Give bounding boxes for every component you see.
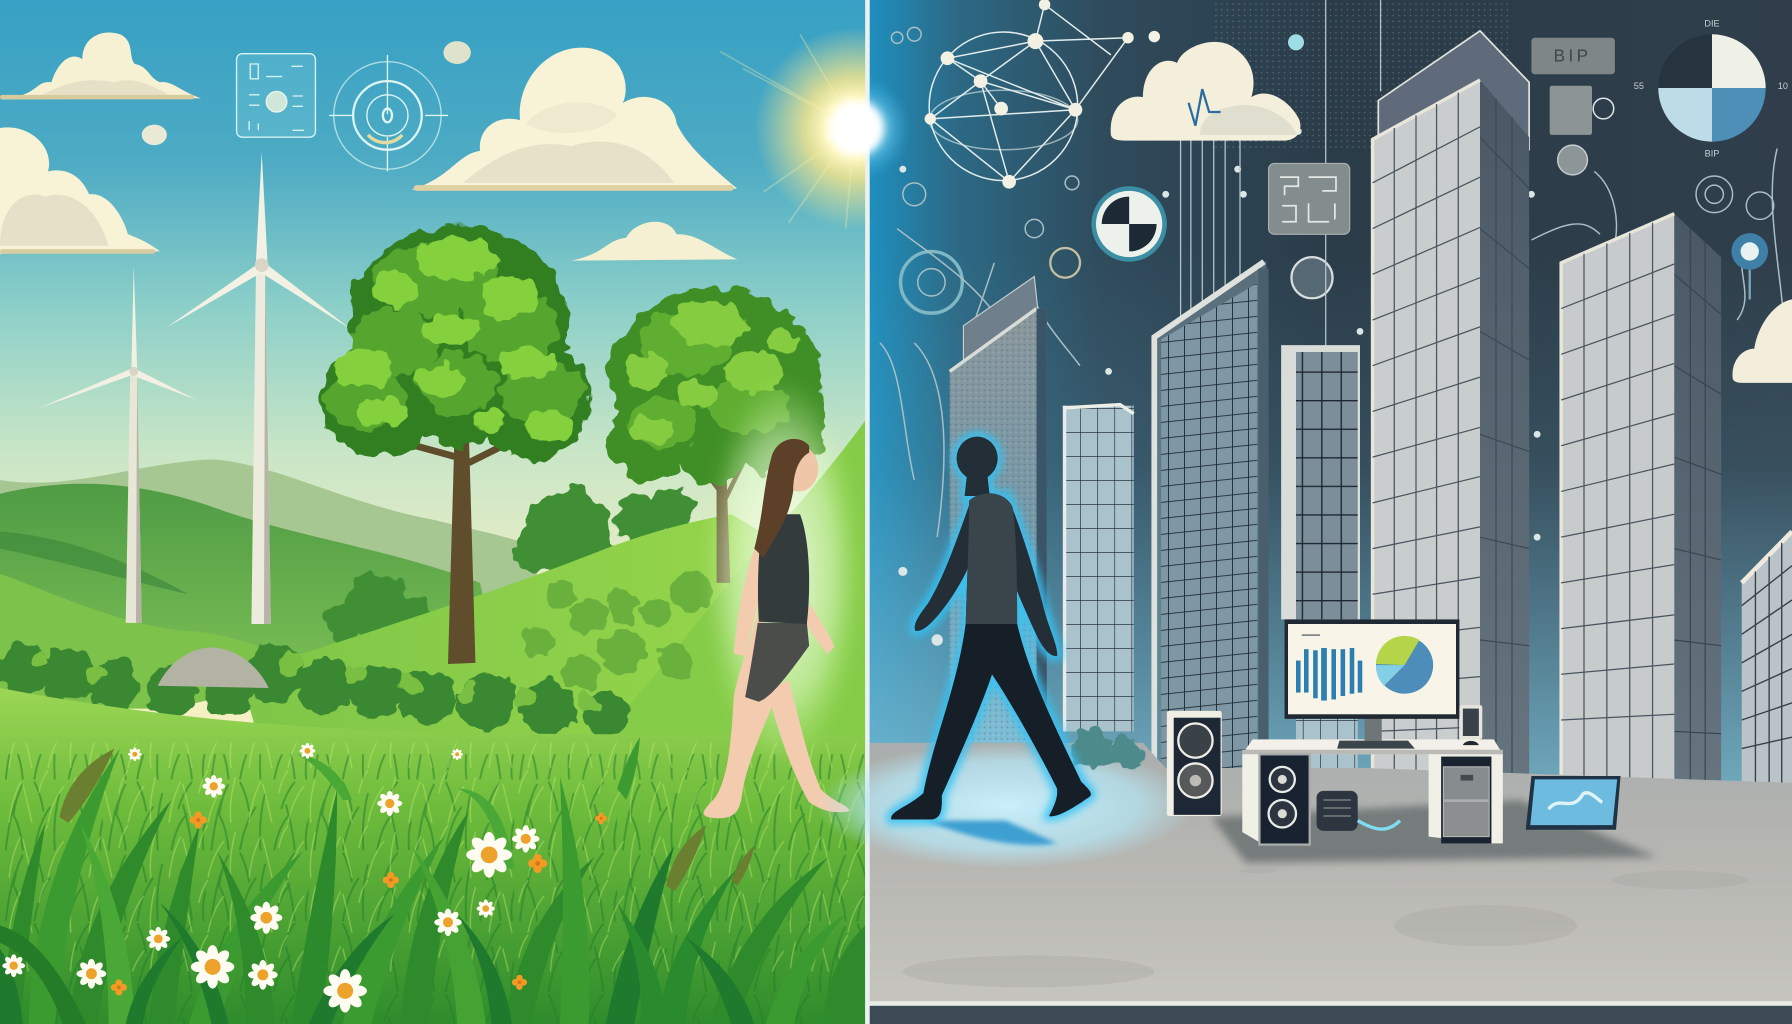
building: second tall tower xyxy=(1561,214,1721,783)
grass texture xyxy=(0,743,865,1024)
router device xyxy=(1317,791,1400,831)
cloud: small right xyxy=(571,222,737,261)
ground stains xyxy=(903,869,1749,987)
ground xyxy=(870,743,1792,1006)
building: small grid xyxy=(1063,405,1134,731)
building: far left xyxy=(950,277,1047,754)
building: right edge xyxy=(1742,531,1792,789)
pie chart: 10 xyxy=(1778,81,1788,91)
hill: bright centre xyxy=(240,514,865,754)
sky xyxy=(0,0,866,731)
dark background xyxy=(870,0,1792,789)
figure: girl walking xyxy=(704,377,861,818)
mountains xyxy=(0,459,537,686)
bush xyxy=(1072,729,1143,768)
grass heads xyxy=(59,749,754,891)
tree: main xyxy=(320,226,591,664)
panel: nature side xyxy=(0,0,955,1024)
label tiles: BIP xyxy=(1554,46,1592,66)
cloud: data cloud with pulse xyxy=(1111,42,1300,141)
icon: hud control panel xyxy=(237,54,315,137)
tablet xyxy=(1526,776,1621,830)
bar chart xyxy=(1296,648,1362,701)
icon: data lines from cloud xyxy=(1181,0,1381,549)
sun core crossing the divider xyxy=(829,101,883,155)
building: pointed glass xyxy=(1154,261,1269,768)
icon: circuit chip panel xyxy=(1269,163,1350,234)
cloud: large centre xyxy=(411,48,737,191)
wind turbine: right xyxy=(166,152,351,624)
desk set with monitor xyxy=(1167,619,1621,845)
hill: distant bush xyxy=(325,488,695,641)
desk shadow xyxy=(1211,800,1657,863)
shrubs band xyxy=(0,643,629,737)
webcam device xyxy=(1459,705,1482,745)
label tiles xyxy=(1531,38,1615,135)
divider xyxy=(865,0,870,1024)
hill: right behind figure xyxy=(594,421,865,754)
sun xyxy=(720,27,955,229)
pie chart: DIE xyxy=(1704,18,1720,28)
desk xyxy=(1242,739,1503,845)
panel: technology side xyxy=(807,0,1792,1024)
icon: target scope xyxy=(329,55,448,171)
cloud: left lower xyxy=(0,127,160,254)
hill: front left xyxy=(0,574,320,709)
cloud: right edge xyxy=(1732,299,1792,383)
building: dark grid xyxy=(1281,345,1360,770)
hill: dark back xyxy=(0,484,503,686)
boulder xyxy=(158,647,269,688)
pie chart: BIP xyxy=(1705,149,1719,159)
wind turbine: left xyxy=(37,265,197,623)
icon: blue ring node xyxy=(1731,233,1768,299)
icon: small tech nodes xyxy=(880,27,1783,646)
tree: right xyxy=(608,288,827,583)
icon: network sphere xyxy=(925,0,1160,189)
figure: man walking xyxy=(891,437,1091,819)
flowers xyxy=(2,743,607,1013)
pie chart on monitor xyxy=(1376,636,1433,694)
cloud puffs xyxy=(142,41,471,145)
grass blades xyxy=(0,737,865,1024)
pie chart: 55 xyxy=(1634,81,1644,91)
shrubs on hill xyxy=(521,571,712,693)
building: tallest tower xyxy=(1373,31,1529,777)
glow: edge xyxy=(870,85,907,171)
floor glow xyxy=(817,743,1194,869)
keyboard xyxy=(1337,741,1415,749)
pie chart xyxy=(1634,18,1788,159)
speaker: left tower xyxy=(1167,711,1222,816)
monitor with charts xyxy=(1285,619,1459,741)
cloud: top left xyxy=(0,33,201,99)
meadow xyxy=(0,688,865,1024)
icon: pie chart badge xyxy=(1091,186,1167,262)
